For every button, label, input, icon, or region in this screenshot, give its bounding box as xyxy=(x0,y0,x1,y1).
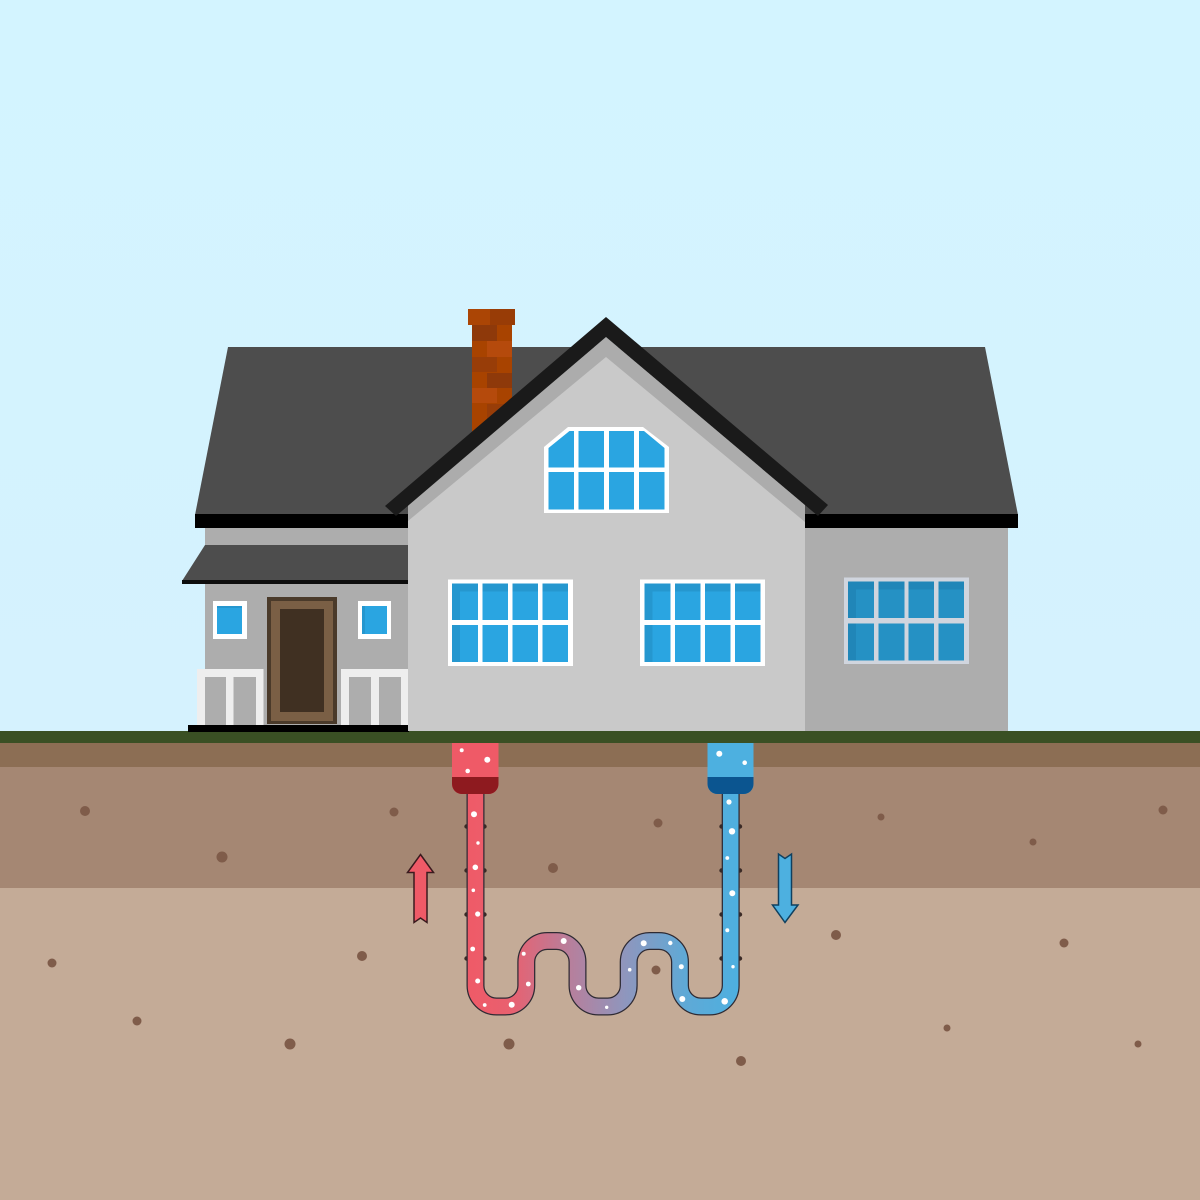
porch floor xyxy=(188,725,409,732)
porch roof xyxy=(182,545,409,584)
front door xyxy=(267,597,337,724)
eaves xyxy=(195,514,1018,528)
porch railing left xyxy=(197,669,264,725)
arrow: heat rising xyxy=(408,854,434,922)
hot cap xyxy=(452,743,498,794)
attic window xyxy=(544,427,669,513)
porch railing right xyxy=(341,669,409,725)
side wall left xyxy=(205,528,408,731)
cold cap xyxy=(708,743,754,794)
pipe outline xyxy=(476,790,731,1006)
pipe studs right xyxy=(719,824,742,961)
main roof xyxy=(195,347,1018,515)
front window right xyxy=(640,580,765,666)
ground layers xyxy=(0,731,1200,1200)
chimney xyxy=(468,309,515,435)
arrow: cold descending xyxy=(772,854,798,922)
underground pipe loop xyxy=(452,743,754,1009)
gable wall xyxy=(408,337,805,731)
house xyxy=(182,309,1018,732)
side wall right xyxy=(805,528,1008,731)
pipe studs left xyxy=(464,824,487,961)
pipe fluid xyxy=(476,790,731,1006)
front window left xyxy=(448,580,573,666)
small window right xyxy=(358,601,391,639)
sky background xyxy=(0,0,1200,735)
gable roof trim xyxy=(385,317,828,516)
small window left xyxy=(213,601,247,639)
soil pebbles xyxy=(48,806,1168,1066)
gable inner shadow band xyxy=(408,337,805,522)
fluid bubbles xyxy=(460,748,747,1009)
side window xyxy=(844,578,969,664)
